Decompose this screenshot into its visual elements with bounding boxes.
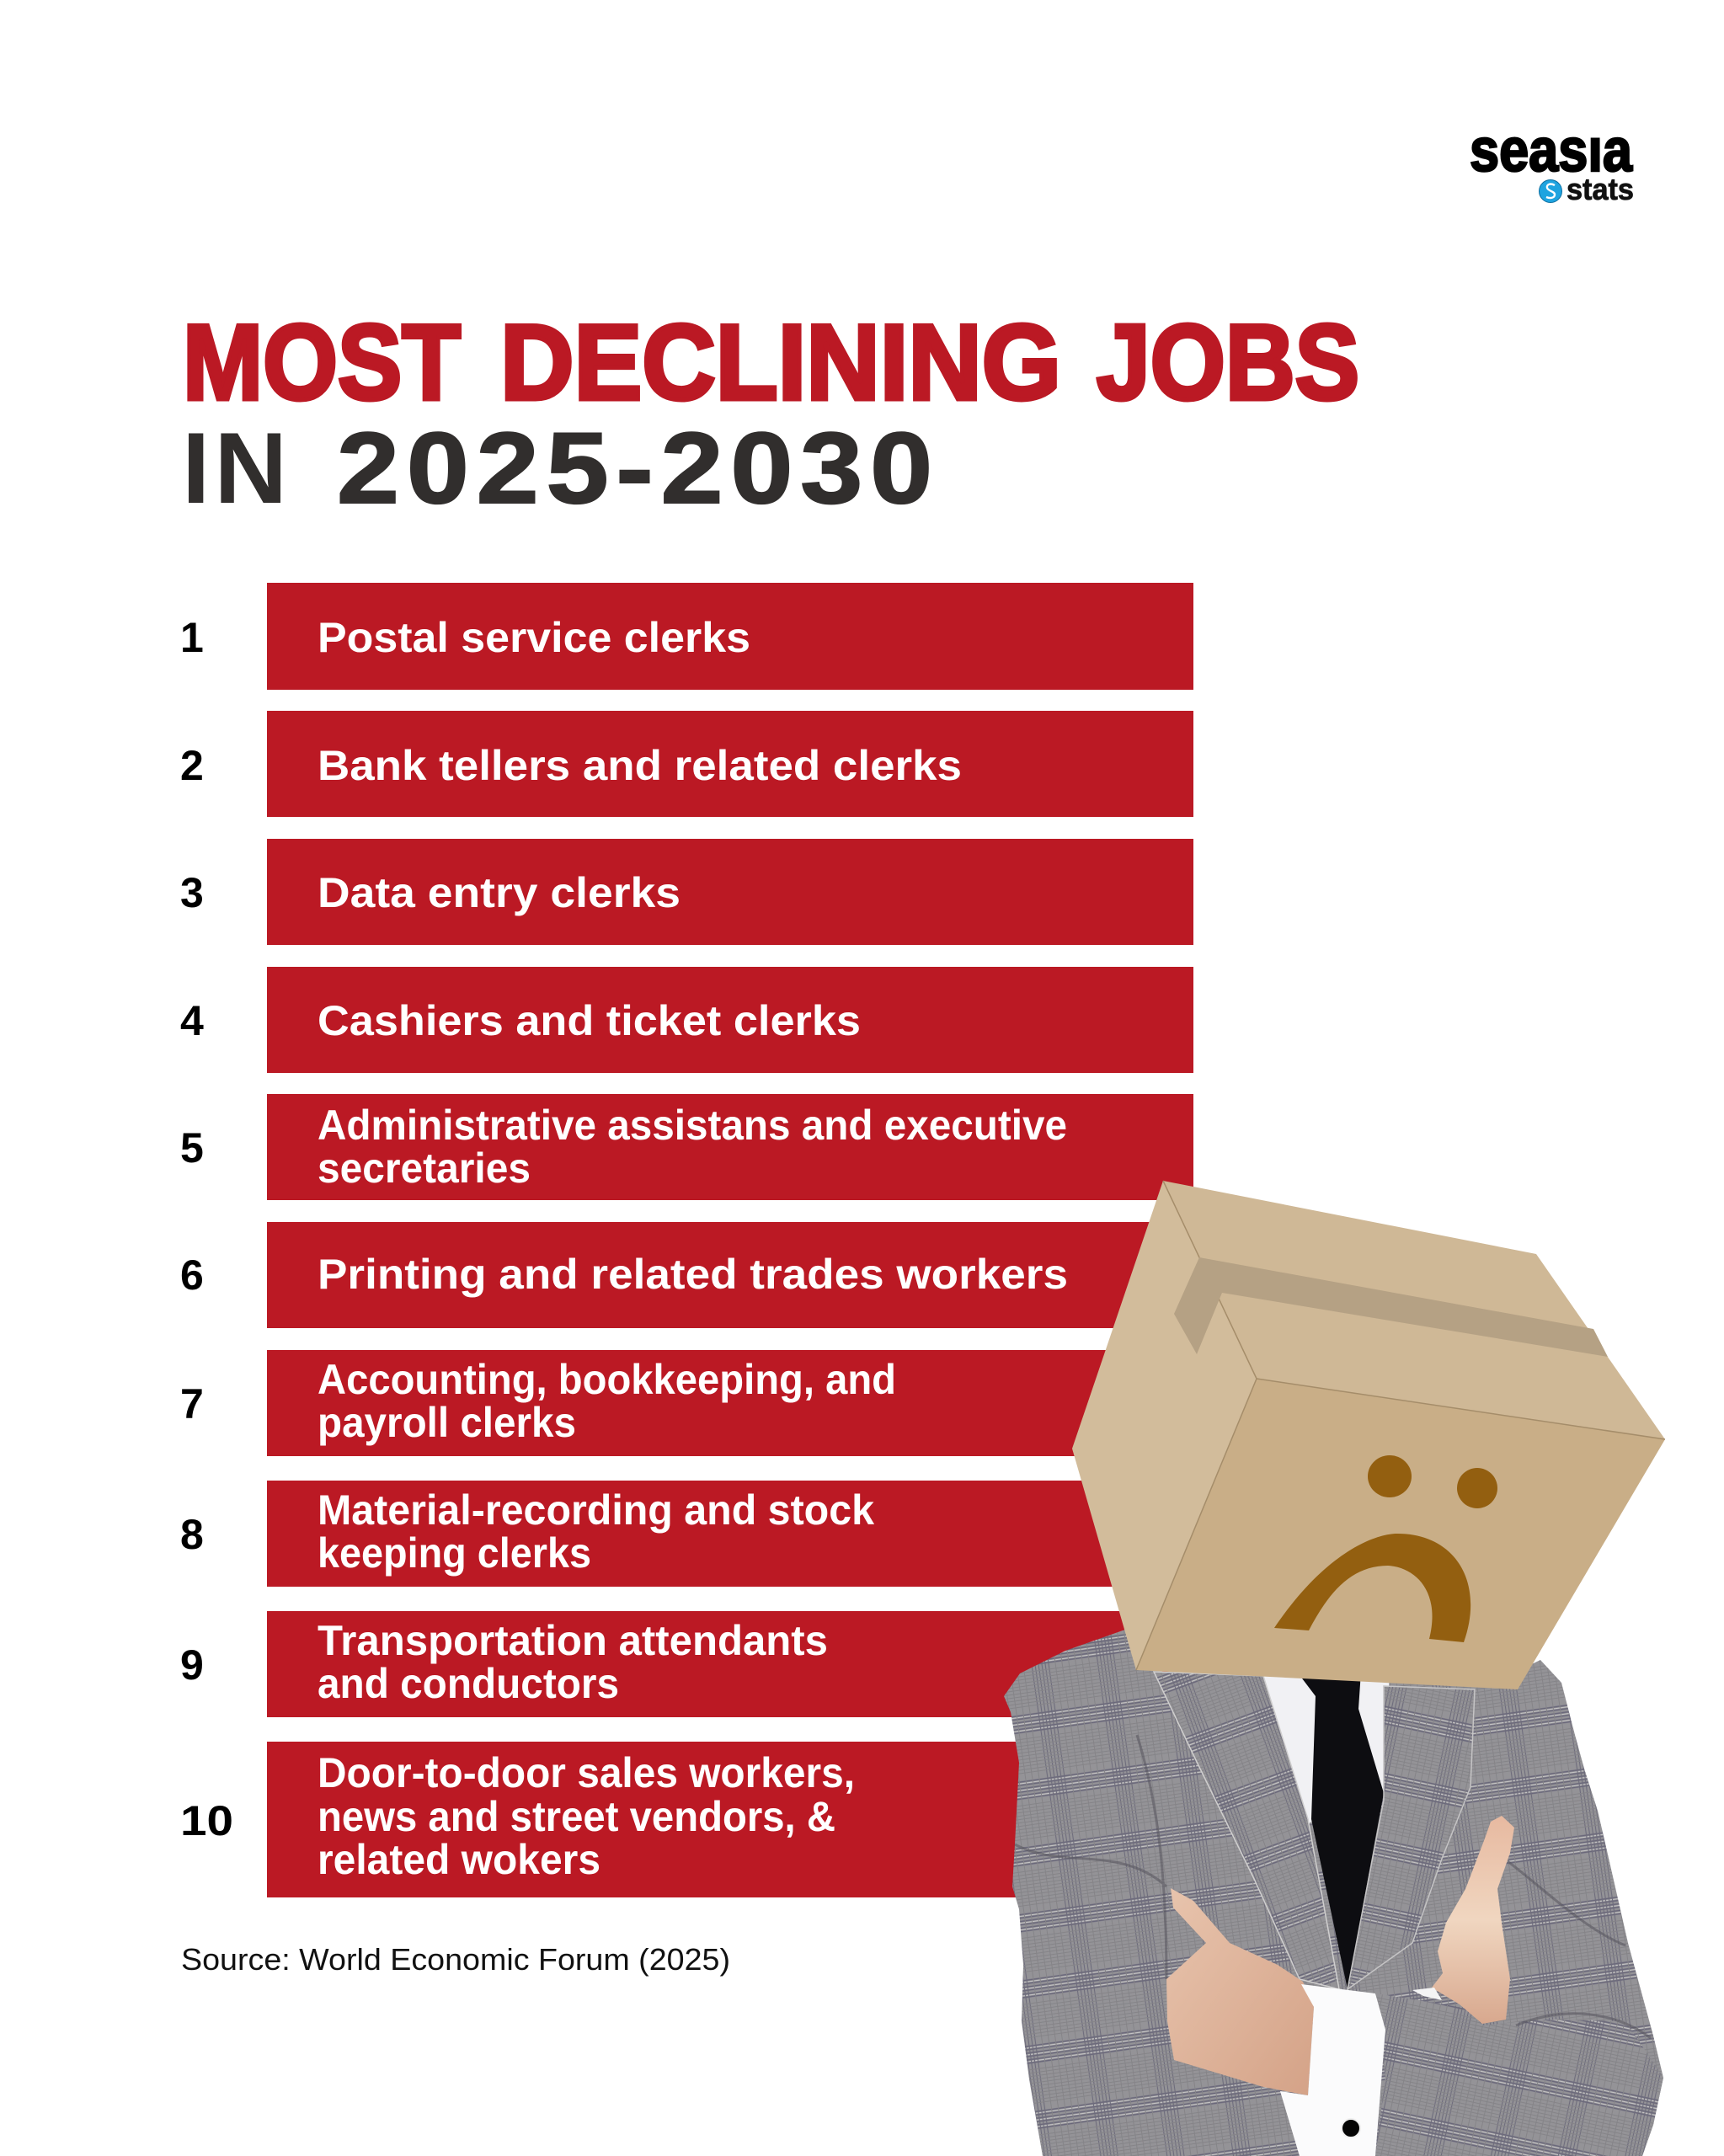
row 8: keeping clerks — [318, 1529, 591, 1577]
row 3: Data entry clerks — [318, 869, 681, 916]
row 10: 10 — [180, 1797, 233, 1844]
row 6: Printing and related trades workers — [318, 1251, 1068, 1298]
row 5: 5 — [180, 1124, 204, 1171]
right lapel — [1348, 1686, 1475, 1989]
row 7 — [180, 1350, 1193, 1456]
row 2: 2 — [180, 742, 204, 789]
logo: seasia stats — [1465, 109, 1638, 206]
row 8: 8 — [180, 1511, 204, 1558]
frown mouth — [1274, 1534, 1470, 1642]
row 4: 4 — [180, 997, 204, 1044]
illustration: businessman with sad cardboard box on head — [1004, 1181, 1665, 2156]
left hand — [1166, 1888, 1314, 2095]
source note: Source: World Economic Forum (2025) — [181, 1942, 730, 1977]
row 4: Cashiers and ticket clerks — [318, 997, 861, 1044]
cufflink — [1342, 2119, 1360, 2137]
title: JOBS — [1097, 302, 1359, 422]
row 6: 6 — [180, 1251, 204, 1299]
row 3: 3 — [180, 869, 204, 916]
row 4 — [180, 967, 1193, 1073]
box edge shading — [1136, 1181, 1665, 1670]
box top face — [1163, 1181, 1665, 1439]
row 10: related wokers — [318, 1836, 600, 1883]
row 7: Accounting, bookkeeping, and — [318, 1356, 896, 1403]
right hand with thumb — [1432, 1816, 1514, 2024]
title: 2025-2030 — [337, 412, 940, 525]
row 8 — [180, 1481, 1193, 1587]
right eye — [1457, 1468, 1497, 1508]
logo: seasia stats: seasia — [1470, 117, 1633, 184]
row 1 — [180, 583, 1193, 690]
row 10 — [180, 1742, 1193, 1897]
row 7: payroll clerks — [318, 1399, 576, 1446]
row 1: 1 — [180, 614, 204, 661]
box front face — [1136, 1379, 1665, 1689]
tie — [1297, 1672, 1384, 1989]
ranked list of declining jobs — [180, 583, 1193, 1897]
suit fold shading — [1015, 1735, 1651, 2038]
packing tape — [1174, 1257, 1608, 1357]
row 2 — [180, 711, 1193, 817]
row 1: Postal service clerks — [318, 614, 750, 661]
row 10: news and street vendors, & — [318, 1793, 835, 1840]
row 9: Transportation attendants — [318, 1617, 828, 1664]
title — [182, 302, 1359, 525]
row 5 — [180, 1094, 1193, 1200]
row 5: secretaries — [318, 1145, 531, 1192]
row 3 — [180, 839, 1193, 945]
row 9: and conductors — [318, 1660, 619, 1707]
row 7: 7 — [180, 1380, 204, 1428]
row 2: Bank tellers and related clerks — [318, 742, 962, 789]
row 6 — [180, 1222, 1193, 1328]
left eye — [1368, 1455, 1412, 1497]
row 8: Material-recording and stock — [318, 1486, 874, 1534]
right forearm sleeve — [1375, 1993, 1663, 2156]
row 10: Door-to-door sales workers, — [318, 1749, 855, 1796]
title: DECLINING — [500, 302, 1061, 422]
title: MOST — [183, 302, 461, 422]
left lapel — [1154, 1672, 1339, 1989]
title: IN — [182, 412, 287, 525]
logo: seasia stats: stats — [1567, 172, 1634, 206]
shirt cuffs — [1280, 1984, 1442, 2156]
cardboard box — [1072, 1181, 1665, 1689]
shirt — [1261, 1672, 1390, 1823]
box left face — [1072, 1181, 1257, 1670]
row 9 — [180, 1611, 1193, 1717]
row 9: 9 — [180, 1641, 204, 1689]
row 5: Administrative assistans and executive — [318, 1102, 1067, 1149]
suit jacket — [1004, 1625, 1663, 2156]
